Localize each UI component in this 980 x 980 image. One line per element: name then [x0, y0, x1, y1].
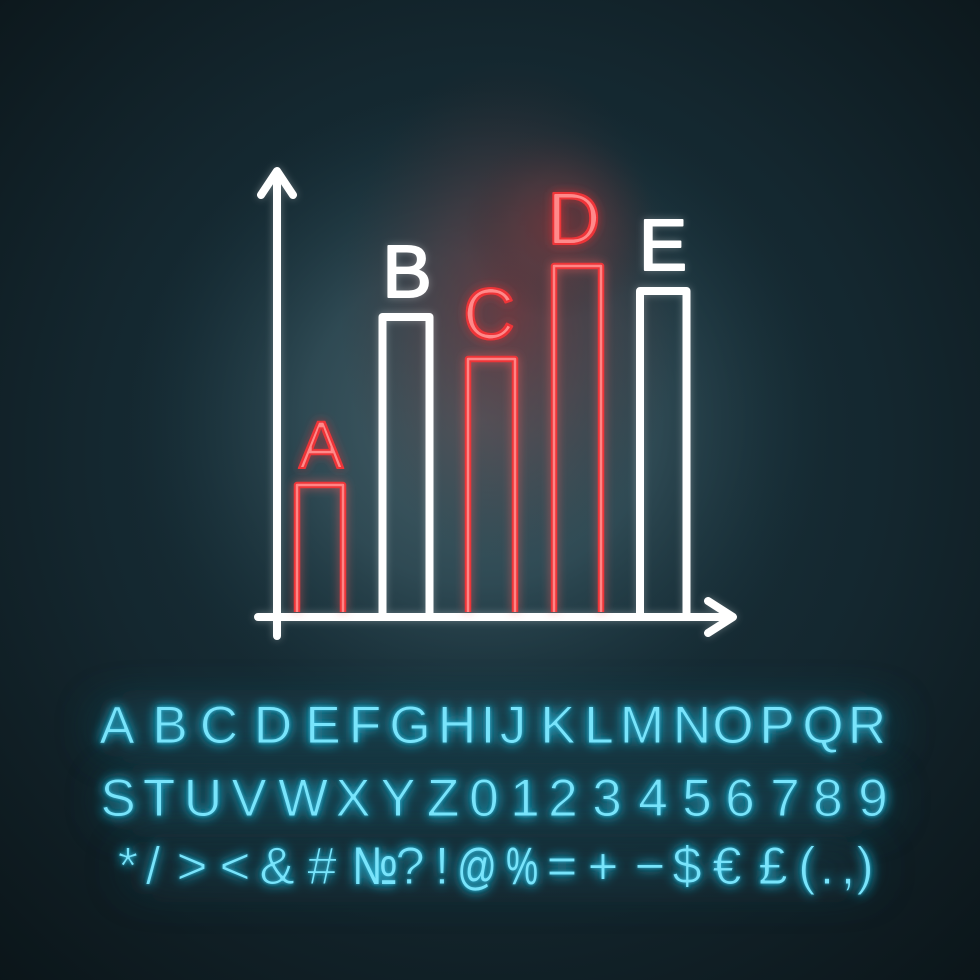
- chart axes with arrows: [258, 171, 733, 636]
- symbols row: @: [457, 838, 497, 895]
- neon alphabet and symbols: [99, 696, 888, 896]
- label B: B: [382, 230, 432, 313]
- bar A: [297, 485, 343, 612]
- bar chart: [258, 171, 733, 636]
- bar D: [554, 266, 601, 612]
- label A: A: [298, 407, 344, 483]
- alphabet row A to R: ABCDEFGHIJKLMNOPQR: [99, 696, 886, 755]
- alphabet row S to Z and digits: STUVWXYZ0123456789: [100, 769, 888, 828]
- symbols row: %: [506, 836, 538, 896]
- bar E: [640, 291, 686, 613]
- label C: C: [463, 275, 515, 355]
- label E: E: [639, 206, 687, 286]
- symbols row: */><&#?!=+−$€£(.,): [118, 837, 874, 896]
- label D: D: [547, 177, 601, 260]
- bar C: [468, 359, 515, 612]
- symbols row: №: [352, 838, 398, 896]
- bar B: [382, 317, 430, 613]
